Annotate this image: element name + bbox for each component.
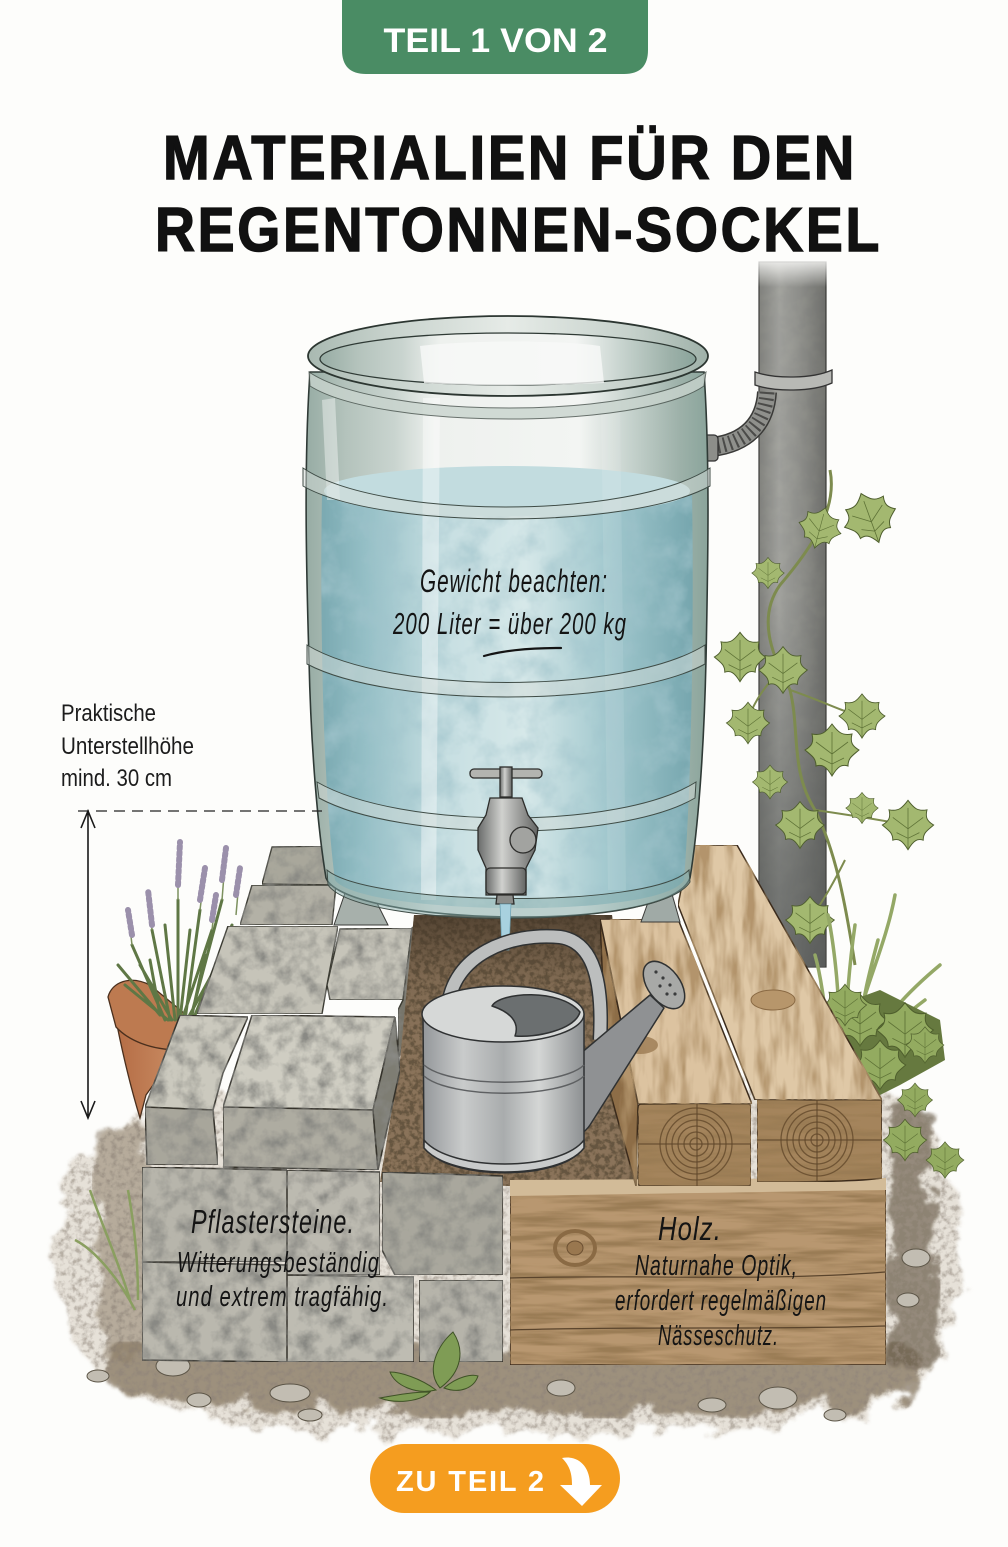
height label: Praktische — [61, 700, 156, 727]
next part button — [370, 1444, 620, 1513]
barrel feet — [334, 893, 388, 925]
wooden plinth — [510, 845, 886, 1365]
back paving stones — [197, 846, 426, 1060]
water surface — [324, 466, 690, 516]
title: MATERIALIEN FÜR DEN — [163, 124, 857, 193]
barrel weight note: 200 Liter = über 200 kg — [392, 606, 627, 641]
pebbles — [87, 1249, 930, 1421]
can rose head — [635, 954, 693, 1016]
lower wooden beam — [510, 1178, 886, 1365]
lavender foliage — [118, 900, 232, 1020]
paving stone label — [176, 1203, 389, 1313]
upper right beam — [678, 845, 882, 1182]
wood label — [615, 1210, 827, 1352]
lower wall — [142, 1167, 503, 1362]
wood label: Naturnahe Optik, — [635, 1250, 798, 1282]
upper row — [145, 1015, 400, 1170]
barrel bands — [303, 468, 710, 918]
water stream — [500, 904, 511, 950]
height label: mind. 30 cm — [61, 765, 172, 792]
ground soil — [52, 1080, 956, 1432]
tap — [470, 767, 542, 904]
grass and shrub right — [815, 895, 964, 1178]
barrel body — [306, 372, 708, 917]
wood label: erfordert regelmäßigen — [615, 1285, 827, 1317]
paving stone label: Pflastersteine. — [191, 1203, 355, 1240]
front paving stones — [142, 1015, 503, 1362]
barrel weight note: Gewicht beachten: — [420, 563, 608, 599]
height label — [61, 700, 194, 792]
tag: part 1 of 2 — [342, 0, 648, 74]
rain inlet hose — [698, 392, 767, 461]
icon: arrow down-right — [560, 1458, 602, 1506]
watering can — [422, 936, 693, 1173]
pipe clamp — [755, 370, 832, 390]
next part button: ZU TEIL 2 — [396, 1466, 544, 1498]
upper left beam — [600, 919, 752, 1186]
glass highlights — [322, 398, 626, 900]
rain barrel — [303, 316, 710, 925]
damp patch on beam — [622, 1036, 658, 1054]
height arrow — [81, 811, 95, 1118]
barrel rim — [308, 316, 708, 419]
height label: Unterstellhöhe — [61, 733, 194, 760]
paving stone label: Witterungsbeständig — [177, 1247, 380, 1279]
paving stone label: und extrem tragfähig. — [176, 1281, 389, 1313]
wood label: Holz. — [658, 1210, 722, 1247]
water volume — [321, 494, 693, 908]
can handle — [448, 936, 601, 1040]
ivy on the pipe — [714, 470, 934, 965]
tag: part 1 of 2: TEIL 1 VON 2 — [384, 22, 608, 60]
downpipe — [698, 255, 832, 967]
left grass — [75, 1190, 138, 1310]
small weed — [380, 1332, 478, 1401]
barrel weight note — [392, 563, 627, 641]
swoosh underline — [484, 648, 561, 656]
can top — [422, 986, 584, 1042]
dashed reference line — [78, 810, 322, 812]
wood label: Nässeschutz. — [658, 1320, 779, 1352]
can spout — [548, 995, 664, 1137]
title: REGENTONNEN-SOCKEL — [155, 196, 882, 265]
height annotation — [61, 700, 322, 1118]
can body — [423, 1014, 584, 1173]
soil gap between the plinths — [380, 915, 640, 1190]
potted lavender — [108, 842, 240, 1118]
title — [155, 124, 882, 265]
terracotta pot — [108, 980, 190, 1118]
